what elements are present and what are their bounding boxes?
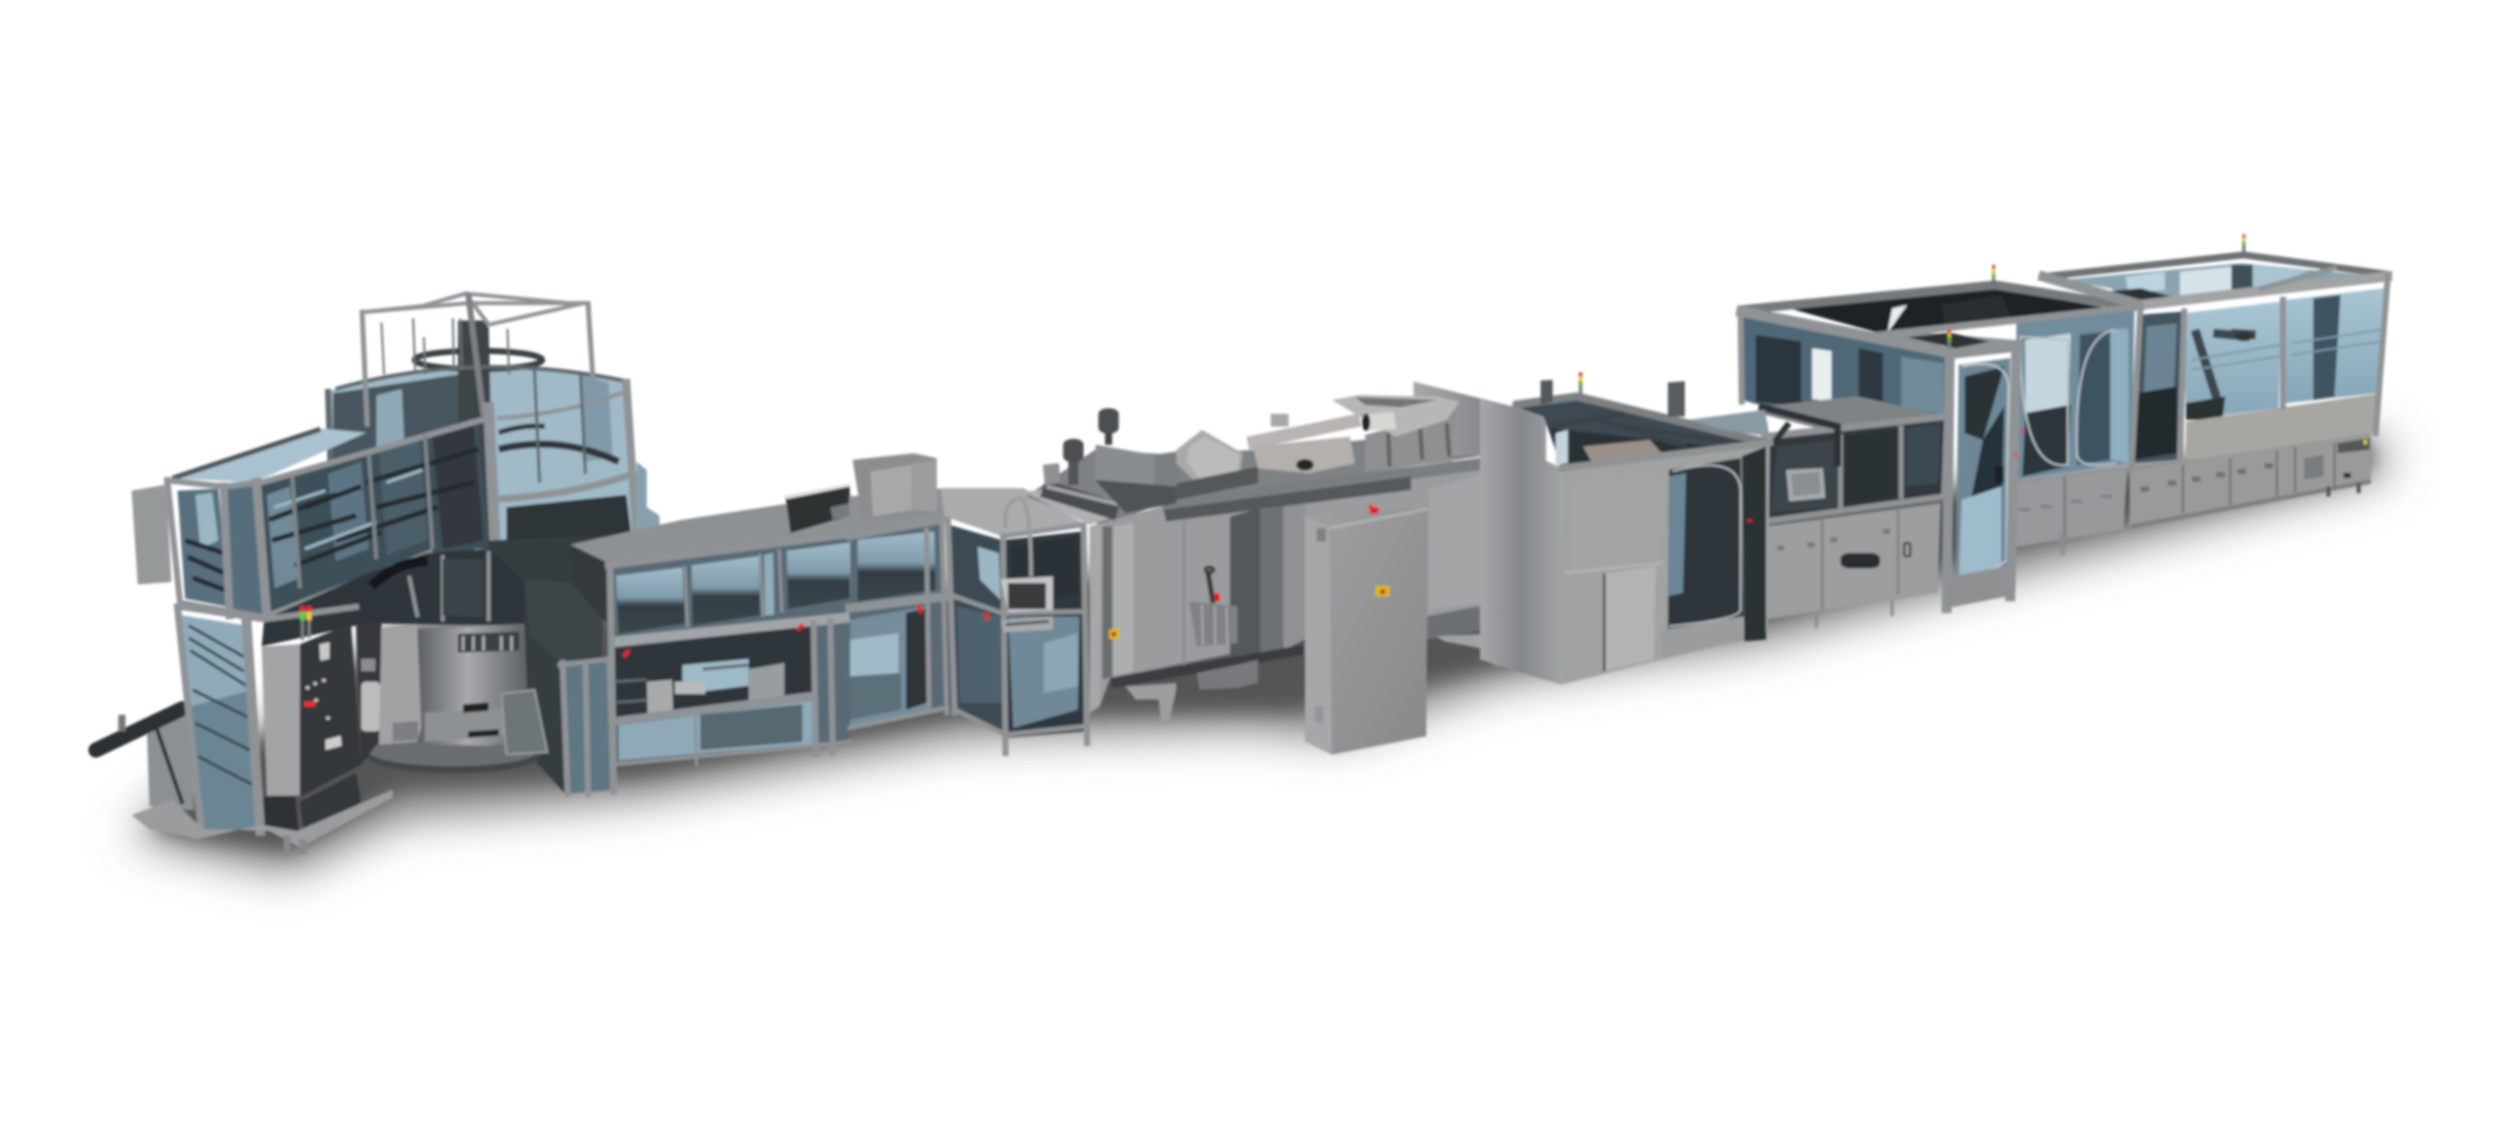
station 1: rotary tower and enclosure: [96, 294, 659, 856]
infeed station cover and cabinet: [1759, 396, 1947, 628]
drum: [417, 624, 529, 746]
process chamber: [1090, 457, 1495, 713]
front body: [611, 534, 850, 767]
grey side box: [132, 484, 171, 584]
under conveyor: [1125, 603, 1508, 725]
lower enclosure: [178, 607, 361, 843]
station 2 right end and enclosure: [849, 382, 1561, 755]
top cover: [570, 494, 851, 563]
station 2: long framed module: [524, 483, 851, 794]
rotary disc: [366, 736, 540, 773]
top windows: [616, 543, 850, 634]
frame rails: [608, 534, 850, 565]
base plate: [132, 790, 393, 848]
grey service box: [379, 626, 421, 745]
right side rear panel: [636, 462, 659, 536]
backing behind top equipment: [1026, 440, 1490, 526]
stations 4 to 6: [1480, 235, 2392, 685]
rear glazed section: [2010, 308, 2134, 555]
red safety marks: [624, 624, 803, 657]
cylindrical glass tower: [328, 294, 636, 624]
right end unit: [2130, 288, 2384, 526]
mechanism bay: [614, 626, 815, 719]
HMI enclosure: [941, 488, 1087, 753]
area above the drum: [262, 549, 524, 646]
forming station: [1480, 373, 1770, 685]
rear top frame: [1741, 265, 2136, 335]
top cover continuation: [849, 488, 947, 536]
large panel wall behind: [1414, 382, 1561, 685]
left louvre section: [524, 580, 603, 661]
top process equipment: [1023, 395, 1459, 525]
control cabinet: [262, 624, 361, 797]
top metal box: [853, 453, 937, 522]
module right end: [850, 518, 947, 728]
tall corner frame: [1741, 312, 2025, 608]
foot: [287, 835, 302, 856]
small panel at drum: [501, 690, 547, 754]
end unit roof frame: [2044, 235, 2392, 470]
gooseneck arm: [1005, 498, 1031, 576]
tower base backing: [489, 532, 659, 794]
HMI arm on top: [785, 483, 850, 533]
lower bay glass: [619, 700, 812, 760]
valve column: [356, 621, 382, 765]
front electrical cabinet: [1305, 506, 1428, 755]
stack light: [300, 606, 312, 640]
left conveyor: [96, 702, 194, 810]
touch monitor: [1000, 576, 1053, 632]
left frame section: [560, 659, 614, 794]
floor shadow: [130, 440, 2390, 870]
upper enclosure: [167, 420, 489, 617]
